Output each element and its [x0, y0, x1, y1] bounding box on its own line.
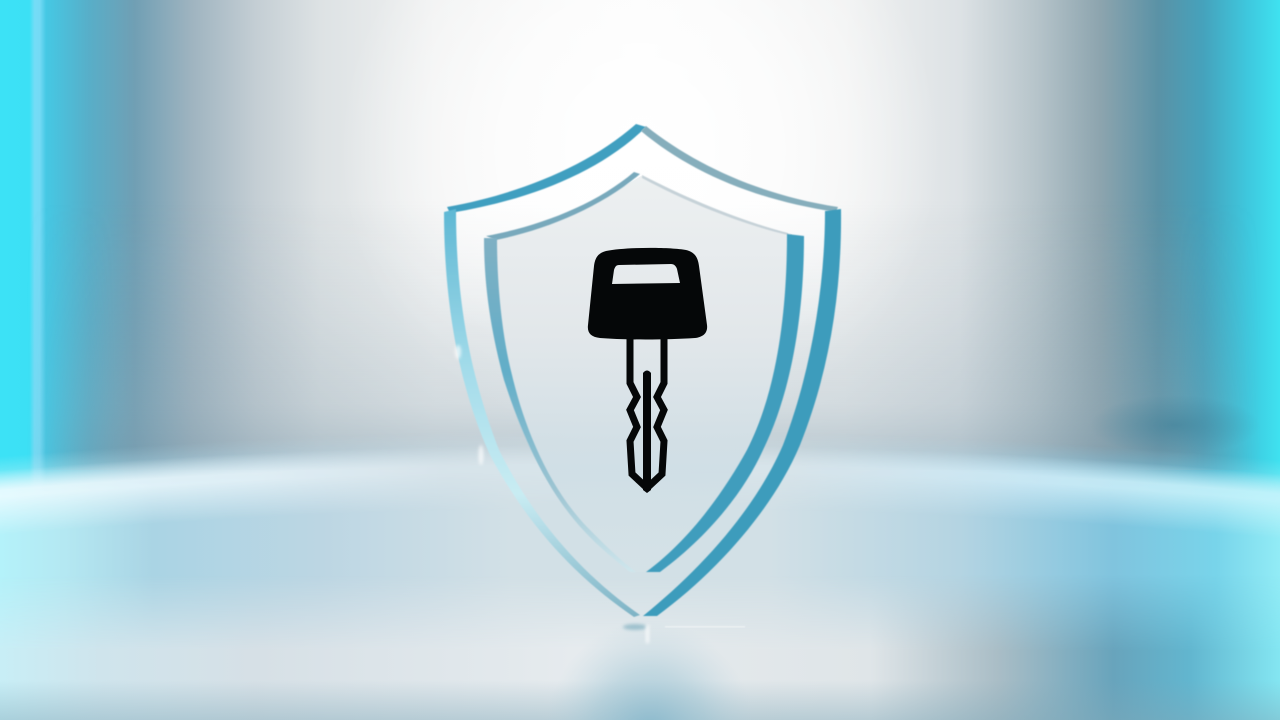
inner glass — [490, 176, 792, 572]
inner frame top left — [486, 172, 640, 240]
inner frame top right — [642, 175, 788, 235]
background wall — [0, 0, 1280, 492]
key centre groove — [643, 370, 651, 493]
ground contact glint — [623, 624, 745, 643]
key head — [588, 248, 707, 340]
shield — [444, 124, 841, 617]
outer frame left edge — [444, 209, 640, 617]
key blade — [630, 338, 664, 488]
inner frame right edge — [646, 234, 804, 572]
edge glints — [455, 345, 484, 465]
icon: key — [588, 248, 707, 493]
outer glass — [444, 126, 839, 616]
outer frame right edge — [643, 209, 841, 616]
floor reflection of the shield — [545, 620, 755, 720]
outer frame top left — [447, 124, 646, 213]
floor — [0, 446, 1280, 720]
inner frame left edge — [484, 238, 636, 572]
outer frame top right — [641, 126, 838, 212]
